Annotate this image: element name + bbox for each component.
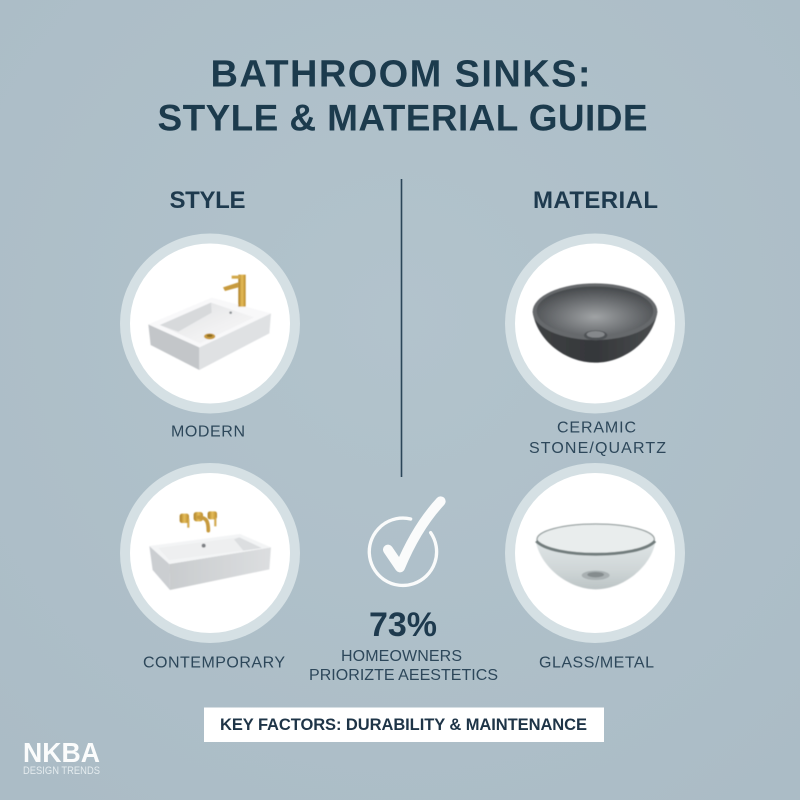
ring: [120, 463, 300, 643]
panel: contemporary sink: [120, 463, 300, 643]
label: glass and metal: GLASS/METAL: [539, 654, 654, 672]
stat caption: PRIORIZTE AEESTETICS: [309, 667, 498, 684]
icon: check mark in circle: [369, 501, 441, 585]
callout: key factors: [204, 708, 604, 742]
ring: [120, 234, 300, 414]
icon: contemporary trough sink with wall faucet: [149, 511, 271, 590]
callout: key factors: KEY FACTORS: DURABILITY & MAINTENANCE: [220, 716, 587, 734]
stat caption: HOMEOWNERS: [341, 648, 462, 665]
panel: glass and metal bowl: [505, 463, 685, 643]
label: modern: MODERN: [171, 424, 245, 440]
panel: modern sink: [120, 234, 300, 414]
label: contemporary: CONTEMPORARY: [143, 654, 285, 672]
title: [158, 54, 648, 138]
heading: material: MATERIAL: [533, 187, 658, 214]
icon: dark metallic vessel bowl: [533, 283, 657, 363]
ring: [505, 463, 685, 643]
stat caption: [309, 648, 498, 684]
heading: style: STYLE: [170, 187, 246, 214]
logo: NKBA Design Trends: DESIGN TRENDS: [23, 765, 100, 777]
label: ceramic, stone and quartz: STONE/QUARTZ: [529, 440, 666, 457]
ring: [505, 234, 685, 414]
center divider line: [401, 179, 402, 477]
icon: clear glass vessel bowl: [536, 524, 656, 589]
title: BATHROOM SINKS:: [210, 54, 590, 96]
logo: NKBA Design Trends: NKBA: [23, 737, 100, 768]
title: STYLE & MATERIAL GUIDE: [158, 98, 648, 138]
panel: ceramic and stone bowl: [505, 234, 685, 414]
statistic: 73%: 73%: [369, 606, 437, 644]
label: ceramic, stone and quartz: CERAMIC: [557, 420, 636, 436]
icon: modern rectangular sink with gold faucet: [148, 275, 271, 370]
label: ceramic, stone and quartz: [529, 420, 666, 457]
